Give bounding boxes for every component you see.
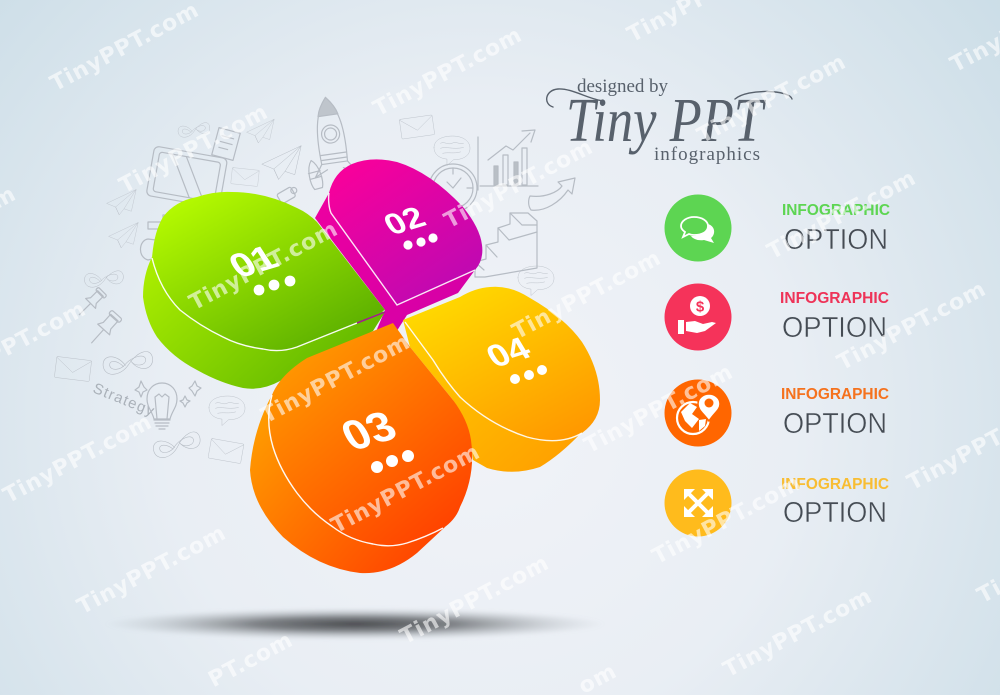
doodle: desk items (140, 215, 177, 260)
petal 02 side (315, 193, 475, 337)
petal 03 top face (269, 323, 472, 546)
petal 04 top face (403, 287, 600, 441)
watermarks: TinyPPT.com (396, 551, 554, 650)
doodle: plane left two (109, 223, 138, 248)
doodle: monitor (146, 146, 228, 208)
doodle: rocket (305, 94, 357, 178)
icon: hand with dollar coin: $ (696, 298, 705, 316)
label: option: OPTION (783, 497, 887, 529)
petal 01 green (143, 192, 385, 389)
petal 04 edge line (405, 322, 582, 441)
doodle: small plane (247, 119, 274, 143)
watermarks: TinyPPT.com (327, 440, 485, 539)
watermarks: TinyPPT.com (46, 0, 204, 97)
doodle: small rocket (305, 159, 324, 190)
doodle: document (212, 128, 240, 160)
petal 02 top face (328, 159, 482, 305)
doodle: small pin (74, 286, 108, 320)
petal 04 number: 04 (480, 331, 538, 374)
petal 01 dots (254, 276, 295, 295)
petal 03 side (250, 395, 445, 573)
watermarks: TinyPPT.com (719, 584, 877, 683)
petal 02 edge line (329, 193, 475, 305)
logo: designed by: designed by (577, 76, 668, 97)
doodle: envelope low (208, 438, 244, 464)
watermarks: TinyPPT.com (693, 50, 851, 149)
doodle: infinity low (152, 430, 202, 460)
petal 03 number: 03 (333, 403, 405, 460)
doodle: envelope top right (399, 115, 435, 139)
icon: chat bubbles (664, 194, 732, 262)
petal 01 number: 01 (222, 239, 286, 286)
watermarks: TinyPPT.com (440, 135, 598, 234)
doodle: clock (429, 164, 477, 212)
watermarks: TinyPPT.com (648, 471, 806, 570)
petal 04 dots (510, 365, 547, 384)
watermarks: TinyPPT.com (508, 246, 666, 345)
doodle: bar chart (478, 130, 538, 190)
icon: hand with dollar coin (664, 284, 732, 350)
doodle: curved arrow (529, 178, 575, 210)
petal 03 dots (371, 450, 414, 473)
logo: infographics: infographics (654, 144, 760, 165)
petal 01 edge line (152, 258, 357, 351)
watermarks: TinyPPT.com (115, 100, 273, 199)
doodle: light bulb (147, 383, 177, 429)
doodle: large plane (262, 146, 301, 179)
petal 02 dots (403, 233, 438, 250)
watermarks: TinyPPT.com (580, 360, 738, 459)
petal 02 number: 02 (377, 200, 432, 241)
petal 04 side (403, 320, 580, 472)
option 1 (664, 194, 890, 262)
watermarks: TinyPPT.com (0, 410, 157, 509)
label: option: OPTION (784, 224, 888, 256)
petal 01 side (143, 257, 385, 389)
watermarks: TinyPPT.com (257, 330, 415, 429)
doodle: speech bubble right (518, 266, 554, 296)
doodle: envelope left (54, 356, 92, 382)
petal 03 edge line (269, 395, 443, 546)
label: infographic green: INFOGRAPHIC (782, 202, 890, 219)
petal 03 orange (250, 323, 472, 573)
doodle: pin (86, 309, 123, 348)
doodle: strategy word: Strategy (91, 380, 158, 420)
floor shadow (105, 608, 605, 640)
doodle: speech bubble (209, 396, 245, 426)
doodle: infinity (177, 122, 211, 138)
label: option: OPTION (783, 408, 887, 440)
logo: designed by TinyPPT infographics (547, 76, 792, 165)
doodle: plane left one (107, 190, 136, 215)
doodle: infinity left (84, 270, 124, 288)
petal 01 top face (152, 192, 385, 351)
petal 01 inner purple line (357, 312, 385, 323)
petal 02 magenta (315, 159, 482, 337)
option 4 (664, 470, 889, 536)
doodle: envelope (231, 168, 259, 186)
watermarks: TinyPPT.com (185, 217, 343, 316)
option 2 (664, 284, 889, 350)
option 3 (664, 380, 889, 446)
doodle: speech bubble top (434, 136, 470, 166)
doodle: infinity large (102, 351, 154, 376)
watermarks: TinyPPT.com (763, 166, 921, 265)
watermarks: TinyPPT.com (833, 277, 991, 376)
petal 04 yellow (403, 287, 600, 472)
doodle: mug (277, 185, 299, 204)
icon: globe with pin (664, 380, 732, 446)
label: infographic red: INFOGRAPHIC (780, 290, 889, 307)
doodle: stairs (475, 213, 537, 277)
doodle cluster (54, 94, 575, 464)
doodle: sparkles (135, 381, 201, 407)
watermarks: TinyPPT.com (73, 521, 231, 620)
watermarks: TinyPPT.com (369, 23, 527, 122)
logo: swashes (547, 89, 792, 107)
logo: TinyPPT script: Tiny PPT (566, 87, 767, 155)
label: option: OPTION (782, 312, 887, 344)
icon: expand arrows (664, 470, 732, 536)
watermarks: PT.com (204, 628, 297, 693)
label: infographic amber: INFOGRAPHIC (781, 476, 889, 493)
label: infographic orange: INFOGRAPHIC (781, 386, 889, 403)
